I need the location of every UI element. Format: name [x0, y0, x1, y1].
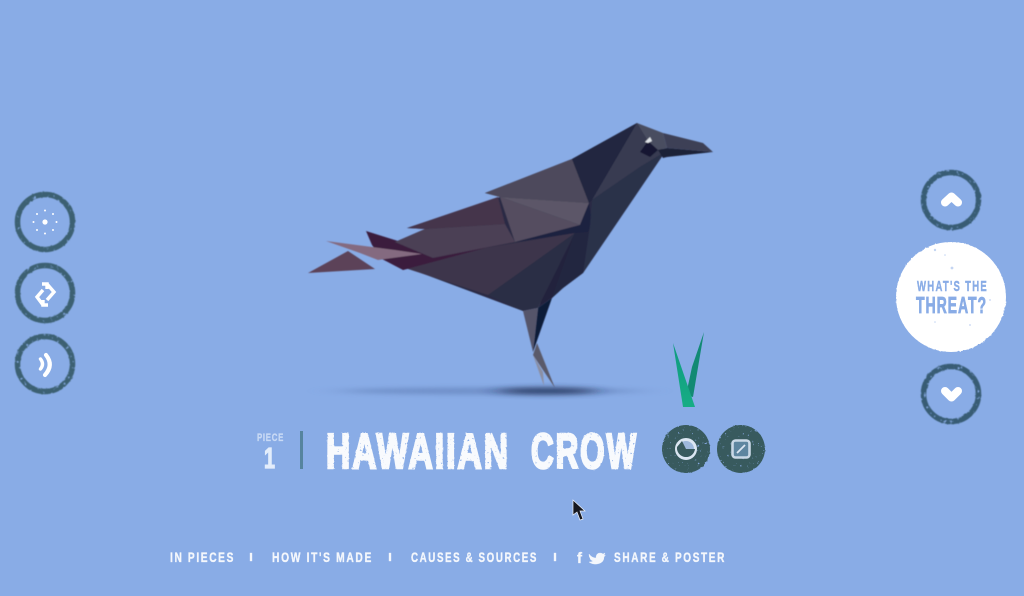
left controls	[18, 194, 72, 392]
footer navigation	[170, 550, 726, 567]
wing	[485, 159, 592, 242]
leg and foot	[523, 298, 555, 388]
button: info square	[717, 425, 765, 473]
tail feathers	[308, 231, 483, 273]
icon: grass blades	[673, 332, 704, 407]
nav link: how it's made: HOW IT'S MADE	[272, 550, 373, 565]
button: pieces overview	[18, 194, 72, 250]
eye	[640, 137, 658, 157]
divider	[300, 431, 303, 469]
illustration: low-poly crow	[308, 123, 713, 388]
light tail feather	[326, 241, 422, 260]
button: next	[924, 366, 978, 422]
nav separators	[250, 553, 556, 561]
piece number: PIECE	[257, 432, 284, 444]
button: previous	[924, 172, 978, 228]
icon: mouse cursor	[573, 500, 585, 520]
ground shadow	[340, 388, 640, 394]
title: HAWAIIAN	[326, 425, 510, 479]
back feathers	[395, 197, 515, 270]
body	[395, 123, 665, 311]
button: sound	[18, 336, 72, 392]
button: what's the threat	[896, 242, 1006, 352]
nav link: share and poster: SHARE & POSTER	[614, 550, 726, 565]
piece number: 1	[264, 443, 275, 475]
head and neck	[572, 123, 665, 273]
right controls	[896, 172, 1006, 422]
button: shuffle arrows	[18, 266, 72, 320]
nav link: in pieces: IN PIECES	[170, 550, 235, 565]
title: CROW	[531, 425, 638, 479]
icon: facebook: f	[577, 550, 583, 567]
nav link: causes and sources: CAUSES & SOURCES	[411, 550, 538, 565]
piece number	[257, 432, 284, 475]
button: population pie	[662, 425, 710, 473]
beak	[637, 123, 713, 158]
icon: twitter bird	[589, 553, 606, 564]
